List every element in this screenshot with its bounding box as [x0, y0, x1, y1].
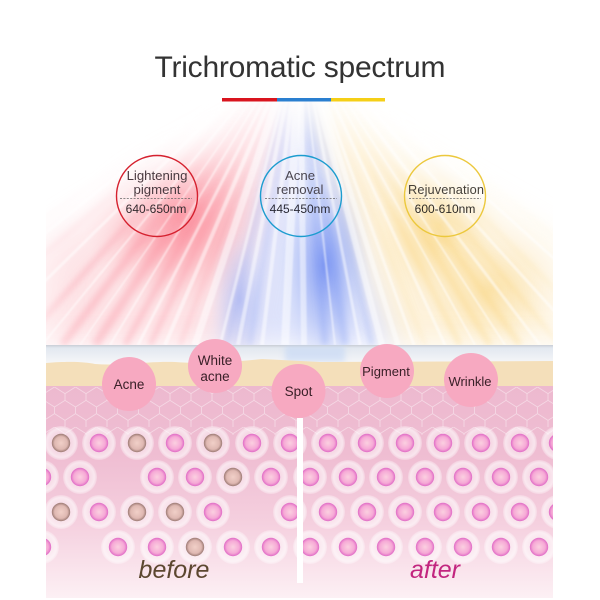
light rays background: [46, 102, 553, 345]
tan epidermis band: [46, 359, 553, 386]
bubble: Acne: Acne: [114, 377, 144, 392]
blue tint on surface layer: [285, 346, 345, 362]
surface layer: [46, 345, 553, 365]
circle: lightening pigment: 640-650nm: [126, 202, 186, 216]
circle: lightening pigment: Lightening: [127, 168, 187, 183]
red light glow: [46, 106, 282, 345]
bubble: Acne: [102, 357, 156, 411]
white streaks across the rays: [46, 116, 553, 345]
bubble: Pigment: [360, 344, 414, 398]
circle: acne removal: removal: [277, 182, 324, 197]
label: after: after: [410, 556, 462, 584]
bubble: Wrinkle: Wrinkle: [448, 374, 492, 389]
bubble: Pigment: Pigment: [362, 364, 410, 379]
cell row 4: [25, 530, 556, 564]
white before/after divider: [297, 418, 303, 583]
circle: rejuvenation: Rejuvenation: [408, 182, 484, 197]
bubble: White acne: White: [198, 353, 232, 368]
cell row 1: [44, 426, 575, 460]
yellow light glow: [313, 106, 553, 345]
bubble: Spot: [272, 364, 326, 418]
skin cross-section panel: [25, 345, 575, 598]
label: before: before: [139, 556, 209, 584]
bubble: White acne: [188, 339, 242, 393]
hexagon pattern: [46, 387, 553, 435]
circle: lightening pigment: [116, 156, 198, 236]
circle: acne removal: [260, 156, 342, 236]
circle: acne removal: Acne: [285, 168, 315, 183]
circle: rejuvenation: 600-610nm: [415, 202, 475, 216]
bubble: Spot: Spot: [285, 384, 313, 399]
bubble: Wrinkle: [444, 353, 498, 407]
bubble: White acne: acne: [200, 369, 230, 384]
circle: lightening pigment: pigment: [134, 182, 181, 197]
cell row 3: [44, 495, 575, 529]
circle: acne removal: 445-450nm: [270, 202, 330, 216]
title: Trichromatic spectrum: [154, 51, 446, 84]
tricolour underline bar: [222, 98, 385, 102]
circle: rejuvenation: [404, 156, 486, 236]
cell row 2: [25, 460, 556, 494]
blue light glow: [212, 102, 394, 345]
pink dermis: [46, 386, 553, 598]
